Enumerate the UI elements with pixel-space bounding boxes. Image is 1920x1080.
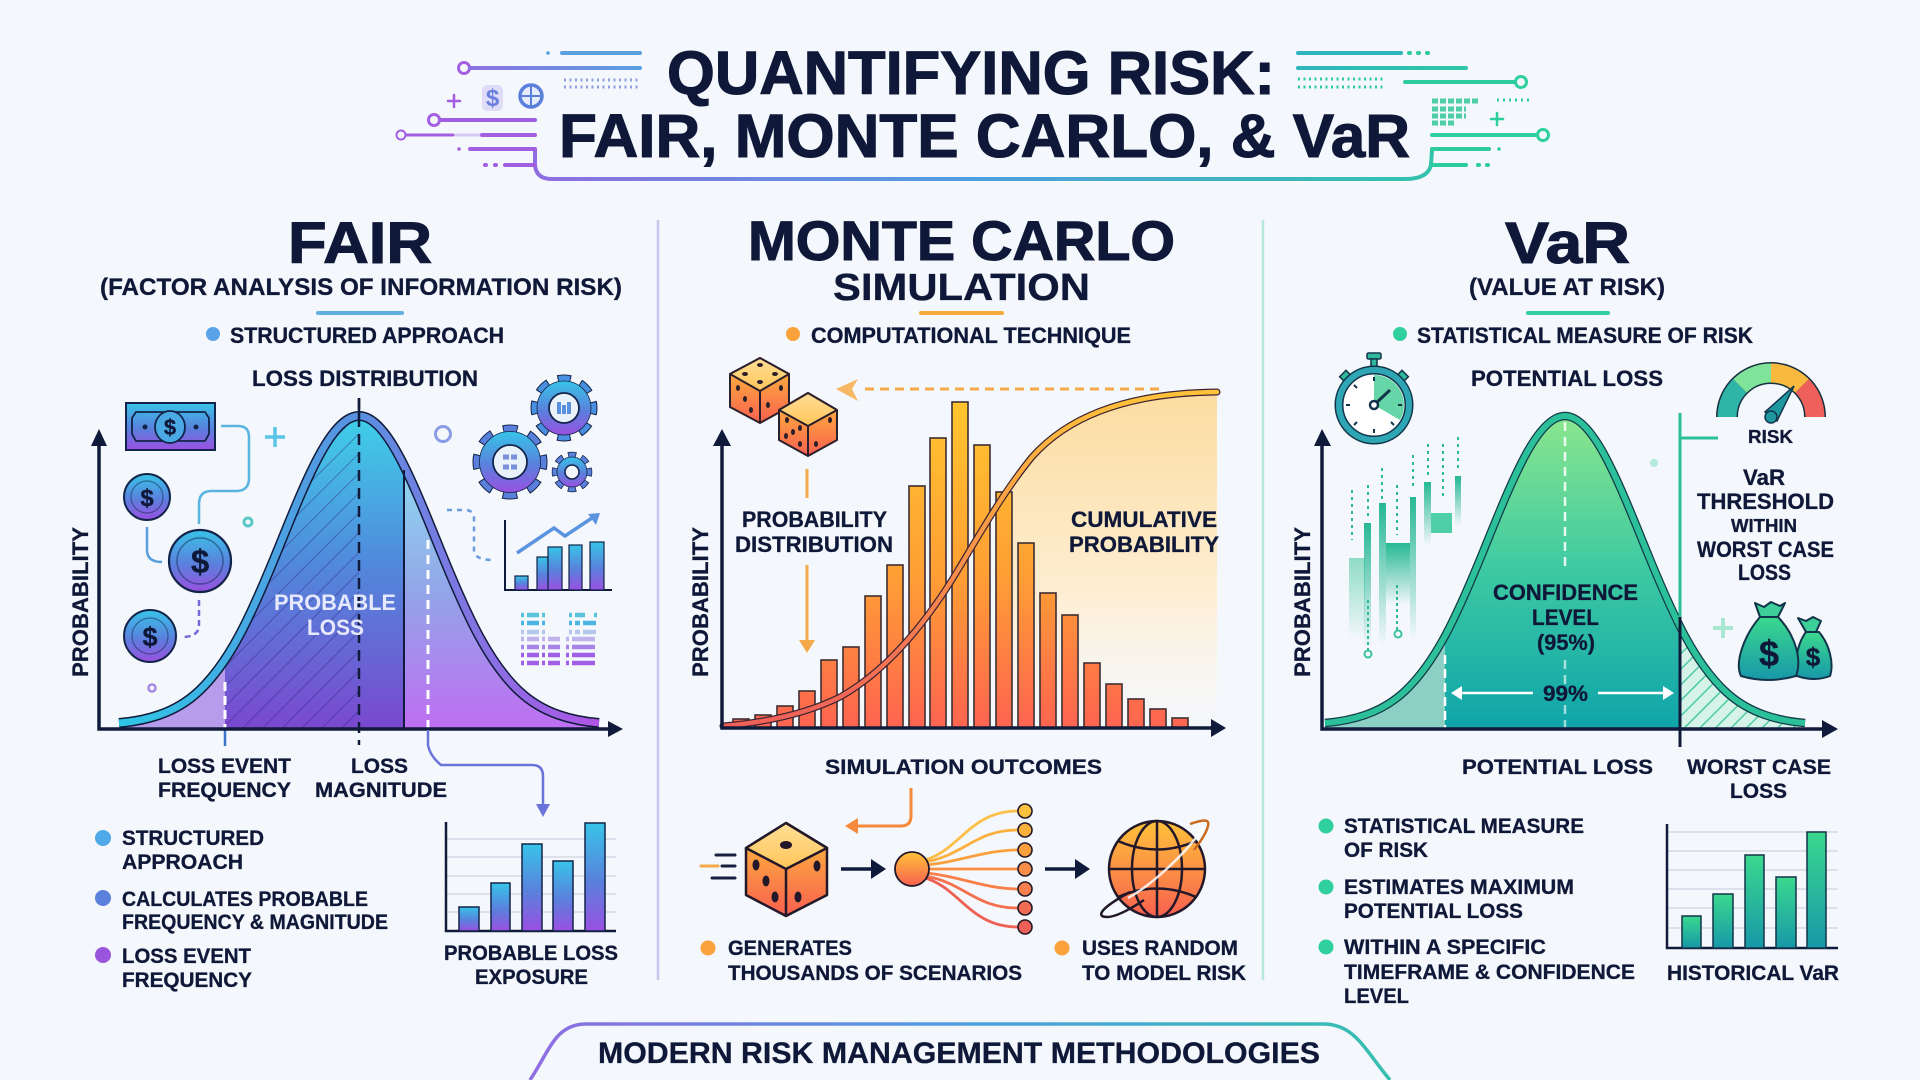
icon: data matrix — [521, 615, 597, 663]
curve label: probable loss — [274, 590, 396, 640]
axis label: loss event frequency — [158, 755, 291, 802]
chart title: potential loss: POTENTIAL LOSS — [1471, 366, 1663, 391]
arrow: die to node — [841, 859, 886, 879]
label: probability distribution: DISTRIBUTION — [735, 532, 893, 557]
VaR bullet list: POTENTIAL LOSS — [1344, 900, 1523, 923]
icon: coins and connectors: $ — [140, 485, 154, 512]
Monte Carlo bullet: generates scenarios: GENERATES — [728, 937, 852, 960]
axis label: loss event frequency: FREQUENCY — [158, 779, 291, 802]
icon: coins and connectors — [124, 426, 249, 662]
FAIR bullet list: FREQUENCY & MAGNITUDE — [122, 911, 388, 934]
axis label: worst case loss: LOSS — [1730, 780, 1787, 803]
icon: dollar bill — [126, 403, 215, 450]
FAIR bullet list: STRUCTURED — [122, 827, 264, 850]
icon: rolling die — [746, 823, 827, 916]
VaR heading: VaR — [1505, 211, 1630, 276]
label: probability distribution — [735, 507, 893, 557]
arrow: fan-out to globe — [1045, 859, 1090, 879]
axis label: potential loss: POTENTIAL LOSS — [1462, 756, 1653, 779]
panel: VaR — [1290, 211, 1839, 1008]
curve label: probable loss: LOSS — [307, 615, 364, 640]
divider lines — [658, 220, 1263, 980]
icon: dollar bill: $ — [164, 415, 176, 440]
label: confidence level: (95%) — [1537, 630, 1595, 655]
icon: money bags — [1739, 602, 1832, 680]
footer banner — [530, 1024, 1390, 1080]
FAIR heading: (FACTOR ANALYSIS OF INFORMATION RISK) — [100, 274, 622, 301]
Monte Carlo bullet: generates scenarios — [700, 937, 1022, 985]
VaR bullet list: OF RISK — [1344, 839, 1428, 862]
bell curve with threshold — [1314, 410, 1838, 747]
chart label: probable loss exposure — [444, 942, 618, 989]
FAIR bullet list: CALCULATES PROBABLE — [122, 888, 368, 911]
label: 99% span arrows — [1451, 681, 1674, 706]
VaR bullet list — [1318, 815, 1635, 1008]
Monte Carlo bullet: uses random: TO MODEL RISK — [1082, 962, 1246, 985]
label: risk: RISK — [1748, 427, 1793, 447]
chart title: loss distribution: LOSS DISTRIBUTION — [252, 366, 478, 391]
FAIR heading — [100, 211, 622, 313]
footer banner: MODERN RISK MANAGEMENT METHODOLOGIES — [598, 1037, 1320, 1070]
label: VaR threshold — [1697, 465, 1834, 585]
bar chart: historical VaR — [1667, 824, 1838, 948]
icon: gears — [477, 379, 593, 495]
Monte Carlo bullet: generates scenarios: THOUSANDS OF SCENARIOS — [728, 962, 1022, 985]
arrow: dashed from curve to dice — [836, 379, 1163, 401]
Monte Carlo heading: SIMULATION — [833, 267, 1090, 309]
title: QUANTIFYING RISK: — [667, 39, 1275, 107]
title frame and circuit decoration: $ — [486, 85, 500, 112]
icon: coins and connectors: $ — [191, 543, 209, 580]
arrow: outcomes to die — [845, 788, 911, 834]
icon: money bags: $ — [1806, 642, 1821, 672]
Monte Carlo heading — [748, 209, 1175, 313]
FAIR bullet list: FREQUENCY — [122, 969, 252, 992]
VaR tagline: STATISTICAL MEASURE OF RISK — [1417, 323, 1753, 348]
speed lines — [701, 855, 735, 878]
Monte Carlo heading: MONTE CARLO — [748, 209, 1175, 272]
panel: FAIR — [68, 211, 623, 992]
Monte Carlo bullet: uses random — [1054, 937, 1246, 985]
VaR heading: (VALUE AT RISK) — [1469, 274, 1665, 301]
icon: scenario fan-out — [895, 804, 1032, 934]
VaR bullet list: LEVEL — [1344, 985, 1409, 1008]
FAIR bullet list: APPROACH — [122, 851, 243, 874]
bell curve chart — [91, 398, 623, 746]
histogram with cumulative curve — [713, 392, 1226, 737]
VaR bullet list: TIMEFRAME & CONFIDENCE — [1344, 961, 1635, 984]
label: 99% span arrows: 99% — [1543, 681, 1588, 706]
icon: candlestick chart — [1349, 437, 1461, 658]
axis label: probability: PROBABILITY — [688, 527, 713, 677]
VaR bullet list: WITHIN A SPECIFIC — [1344, 936, 1546, 959]
axis label: simulation outcomes: SIMULATION OUTCOMES — [825, 756, 1102, 779]
FAIR bullet list: LOSS EVENT — [122, 945, 251, 968]
label: VaR threshold: LOSS — [1738, 560, 1791, 585]
FAIR bullet list — [95, 827, 388, 992]
mini chart: rising bars — [447, 510, 612, 590]
axis label: loss magnitude — [315, 755, 447, 802]
VaR bullet list: STATISTICAL MEASURE — [1344, 815, 1584, 838]
arrow: dice to distribution — [799, 469, 815, 653]
label: VaR threshold: THRESHOLD — [1697, 489, 1834, 514]
chart label: probable loss exposure: EXPOSURE — [475, 966, 588, 989]
icon: coins and connectors: $ — [142, 622, 158, 652]
axis label: worst case loss — [1687, 756, 1831, 803]
VaR bullet list: ESTIMATES MAXIMUM — [1344, 876, 1574, 899]
chart label: probable loss exposure: PROBABLE LOSS — [444, 942, 618, 965]
axis label: loss event frequency: LOSS EVENT — [158, 755, 291, 778]
panel: Monte Carlo — [688, 209, 1246, 985]
label: cumulative probability — [1069, 507, 1219, 557]
axis label: loss magnitude: MAGNITUDE — [315, 779, 447, 802]
axis label: loss magnitude: LOSS — [351, 755, 408, 778]
label: probability distribution: PROBABILITY — [742, 507, 887, 532]
decorative marks — [148, 426, 450, 692]
chart label: historical VaR: HISTORICAL VaR — [1667, 962, 1839, 985]
icon: globe — [1101, 820, 1208, 917]
axis label: probability: PROBABILITY — [68, 527, 93, 677]
curve label: probable loss: PROBABLE — [274, 590, 396, 615]
axis label: probability: PROBABILITY — [1290, 527, 1315, 677]
label: confidence level: CONFIDENCE — [1493, 580, 1638, 605]
label: cumulative probability: PROBABILITY — [1069, 532, 1219, 557]
label: VaR threshold: WORST CASE — [1697, 537, 1834, 562]
arrow: to exposure chart — [428, 730, 550, 817]
Monte Carlo tagline: COMPUTATIONAL TECHNIQUE — [811, 323, 1131, 348]
icon: stopwatch — [1339, 353, 1409, 440]
FAIR tagline: STRUCTURED APPROACH — [230, 323, 504, 348]
Monte Carlo bullet: uses random: USES RANDOM — [1082, 937, 1238, 960]
label: cumulative probability: CUMULATIVE — [1071, 507, 1217, 532]
axis label: worst case loss: WORST CASE — [1687, 756, 1831, 779]
label: VaR threshold: VaR — [1743, 465, 1785, 490]
FAIR heading: FAIR — [288, 211, 432, 276]
label: confidence level — [1493, 580, 1638, 655]
title frame and circuit decoration — [396, 51, 1548, 179]
label: VaR threshold: WITHIN — [1731, 516, 1797, 536]
icon: two dice — [730, 358, 837, 456]
icon: money bags: $ — [1759, 633, 1779, 674]
title — [559, 39, 1410, 170]
bar chart: probable loss exposure — [446, 822, 616, 931]
title: FAIR, MONTE CARLO, & VaR — [559, 102, 1410, 170]
icon: risk gauge — [1727, 373, 1815, 423]
label: confidence level: LEVEL — [1532, 605, 1599, 630]
VaR heading — [1469, 211, 1665, 313]
decorative marks — [1650, 459, 1733, 638]
